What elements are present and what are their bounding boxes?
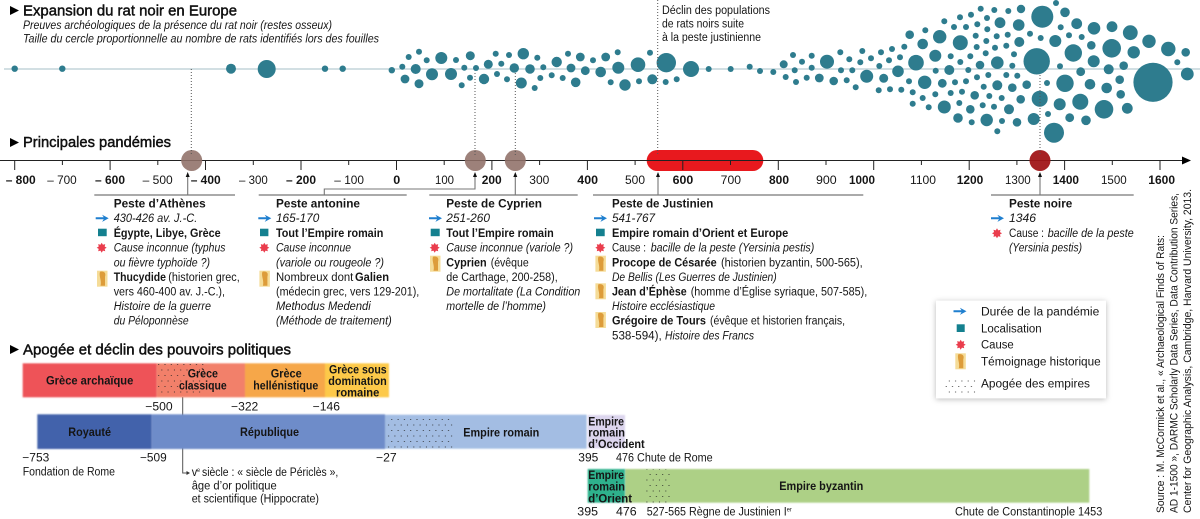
panel: peste d'Athènes: Égypte, Libye, Grèce — [114, 225, 221, 240]
heading: principales pandémies: Principales pandémies — [23, 134, 171, 151]
panel: peste de Justinien: bacille de la peste (Yersinia pestis) — [651, 243, 814, 255]
timeline: Rome: République — [240, 425, 299, 439]
panel: peste d'Athènes: Histoire de la guerre — [114, 301, 211, 313]
timeline: empire romain d'Orient et byzantin: 527-565 Règne de Justinien I — [647, 507, 787, 519]
axis: time scale: 0 — [393, 173, 401, 187]
axis: time scale: 500 — [625, 175, 645, 187]
axis: time scale — [0, 156, 1191, 187]
panel: peste de Cyprien — [429, 195, 580, 313]
timeline: empire romain d'Orient et byzantin: romain — [588, 480, 625, 494]
panel: peste d'Athènes — [94, 195, 240, 328]
timeline: empire romain d'Occident: d’Occident — [588, 437, 645, 451]
timeline: Greece: classique — [179, 378, 227, 392]
markers: pandemic circles — [181, 150, 1050, 171]
panel: peste antonine: Nombreux dont — [276, 272, 354, 284]
axis: time scale: 400 — [577, 173, 598, 187]
panel: peste de Justinien: 538-594), — [612, 330, 662, 342]
heading: expansion du rat noir — [10, 2, 379, 46]
panel: peste de Justinien: Procope de Césarée — [612, 256, 717, 270]
timeline: empire romain d'Occident: Empire — [588, 415, 624, 429]
source note: AD 1-1500 », DARMC Scholarly Data Series, Data Contribution Series, — [1169, 193, 1181, 513]
panel: peste d'Athènes: ou fièvre typhoïde ?) — [114, 258, 210, 270]
red band: peste de Justinien duration — [647, 150, 763, 171]
timeline: empire romain d'Orient et byzantin: Empire — [588, 468, 624, 482]
timeline: empire romain d'Occident — [578, 415, 713, 465]
timeline: Rome: Empire romain — [463, 426, 539, 440]
note: siècle de Périclès: siècle : « siècle de Périclès », — [202, 467, 338, 479]
note: siècle de Périclès: v — [192, 467, 197, 479]
axis: time scale: – 400 — [191, 173, 221, 187]
timeline: Rome: −753 — [22, 453, 49, 465]
source note: Source : M. McCormick et al., « Archaeological Finds of Rats: — [1155, 235, 1167, 513]
panel: peste de Cyprien: Peste de Cyprien — [446, 196, 542, 210]
axis: time scale: 900 — [816, 175, 837, 187]
panel: peste de Justinien: (homme d’Église syriaque, 507-585), — [691, 286, 867, 298]
legend: Localisation — [981, 323, 1042, 335]
panel: peste de Justinien: Empire romain d’Orient et Europe — [612, 226, 789, 240]
panel: peste de Justinien: Peste de Justinien — [612, 196, 713, 210]
timeline: empire romain d'Orient et byzantin: 476 — [616, 507, 637, 519]
timeline: Rome — [22, 414, 587, 478]
timeline: Greece — [23, 362, 389, 414]
timeline: Rome: Fondation de Rome — [23, 466, 115, 478]
timeline: empire romain d'Occident: 476 Chute de Rome — [616, 453, 713, 465]
panel: peste antonine — [258, 195, 419, 328]
panel: peste de Cyprien: de Carthage, 200-258), — [446, 272, 558, 284]
panel: peste noire: Peste noire — [1009, 196, 1073, 210]
panel: peste de Justinien: De Bellis (Les Guerres de Justinien) — [612, 272, 777, 284]
axis: time scale: – 100 — [334, 175, 364, 187]
panel: peste de Cyprien: (évêque — [491, 258, 529, 270]
panel: peste noire: bacille de la peste — [1048, 228, 1134, 240]
source note — [1155, 189, 1194, 513]
legend — [936, 301, 1106, 398]
axis: time scale: 1100 — [910, 175, 936, 187]
note: siècle de Périclès: e — [197, 468, 201, 474]
timeline: Greece: Grèce archaïque — [46, 373, 134, 387]
timeline: Greece: hellénistique — [253, 378, 319, 392]
panel: peste antonine: (variole ou rougeole ?) — [276, 258, 384, 270]
timeline: empire romain d'Orient et byzantin: er — [787, 508, 792, 514]
axis: time scale: 1000 — [849, 173, 875, 187]
panel: peste de Cyprien: Tout l’Empire romain — [446, 226, 554, 240]
axis: time scale: – 500 — [143, 175, 173, 187]
axis: time scale: 1600 — [1148, 173, 1175, 187]
timeline: empire romain d'Occident: romain — [588, 426, 625, 440]
panel: peste de Justinien: Jean d’Éphèse — [612, 284, 687, 298]
timeline: empire romain d'Orient et byzantin: 395 — [577, 507, 598, 519]
axis: time scale: 700 — [721, 175, 741, 187]
axis: time scale: 200 — [482, 173, 502, 187]
panel: peste de Justinien: Histoire des Francs — [665, 330, 754, 342]
panel: peste d'Athènes: du Péloponnèse — [114, 316, 189, 328]
source note: Center for Geographic Analysis, Cambridge, Harvard University, 2013. — [1182, 189, 1194, 513]
axis: time scale: 800 — [769, 173, 789, 187]
Pericles connector line — [183, 397, 190, 475]
panel: peste de Justinien: Cause : — [612, 243, 646, 255]
panel: peste antonine: Methodus Medendi — [276, 301, 371, 313]
panel: peste antonine: Galien — [355, 270, 389, 284]
timeline: Rome: Royauté — [68, 425, 111, 439]
timeline: empire romain d'Orient et byzantin: d’Orient — [588, 491, 632, 505]
timeline: Rome: −509 — [140, 453, 167, 465]
panel: peste antonine: Peste antonine — [276, 196, 360, 210]
timeline: Greece: Grèce sous — [329, 362, 387, 376]
timeline: Greece: domination — [328, 374, 387, 388]
panel: peste antonine: Tout l’Empire romain — [276, 226, 383, 240]
note: siècle de Périclès: âge d’or politique — [192, 480, 277, 492]
panel: peste d'Athènes: Cause inconnue (typhus — [114, 243, 226, 255]
axis: time scale: 1300 — [1005, 175, 1031, 187]
heading: expansion du rat noir: Expansion du rat noir en Europe — [23, 2, 237, 20]
timeline: Greece: −146 — [313, 402, 340, 414]
panel: peste noire: (Yersinia pestis) — [1009, 243, 1082, 255]
axis: time scale: 600 — [673, 173, 694, 187]
note: siècle de Périclès: et scientifique (Hippocrate) — [192, 494, 319, 506]
axis: time scale: 300 — [529, 175, 549, 187]
axis: time scale: 1400 — [1053, 173, 1079, 187]
panel: peste de Cyprien: De mortalitate (La Condition — [446, 286, 580, 298]
timeline: Greece: −322 — [231, 402, 258, 414]
timeline: Greece: −500 — [145, 402, 173, 414]
heading: expansion du rat noir: Preuves archéologiques de la présence du rat noir (restes osseux) — [23, 20, 332, 32]
panel: peste de Cyprien: Cyprien — [446, 256, 487, 270]
panel: peste de Justinien: (évêque et historien français, — [710, 316, 845, 328]
legend: Apogée des empires — [981, 379, 1090, 391]
timeline: empire romain d'Occident: 395 — [578, 453, 598, 465]
panel: peste noire — [991, 195, 1134, 255]
axis: time scale: – 700 — [47, 175, 77, 187]
panel: peste antonine: 165-170 — [276, 213, 320, 225]
annotation: déclin des populations: de rats noirs suite — [662, 18, 744, 30]
panel: peste de Justinien: 541-767 — [612, 213, 656, 225]
axis: time scale: – 600 — [95, 173, 125, 187]
axis: time scale: – 300 — [239, 175, 268, 187]
axis: time scale: 1500 — [1101, 175, 1127, 187]
heading: expansion du rat noir: Taille du cercle proportionnelle au nombre de rats identifiés lors des fouilles — [23, 34, 379, 46]
timeline: Rome: −27 — [376, 453, 397, 465]
timeline: Greece: Grèce — [271, 367, 302, 381]
panel: peste de Justinien — [593, 195, 867, 342]
axis: time scale: – 200 — [286, 173, 316, 187]
panel: peste noire: Cause : — [1009, 228, 1044, 240]
chart: bubble timeline of rat finds — [4, 0, 1200, 143]
panel: peste antonine: (médecin grec, vers 129-201), — [276, 286, 419, 298]
panel: peste de Justinien: Grégoire de Tours — [612, 314, 706, 328]
panel: peste d'Athènes: Peste d’Athènes — [114, 196, 206, 210]
timeline: empire romain d'Orient et byzantin — [577, 468, 1102, 519]
timeline: empire romain d'Orient et byzantin: Empire byzantin — [779, 479, 863, 493]
panel: peste noire: 1346 — [1009, 213, 1037, 225]
timeline: Greece: romaine — [336, 386, 380, 400]
panel: peste de Justinien: (historien byzantin, 500-565), — [721, 258, 863, 270]
connector arrows from pandemic notes to axis — [186, 172, 1042, 195]
panel: peste d'Athènes: vers 460-400 av. J.-C.), — [114, 286, 225, 298]
timeline: Greece: Grèce — [188, 367, 218, 381]
panel: peste d'Athènes: (historien grec, — [168, 272, 240, 284]
panel: peste de Justinien: Histoire ecclésiastique — [612, 301, 715, 313]
panel: peste de Cyprien: Cause inconnue (variole ?) — [446, 243, 573, 255]
annotation: déclin des populations — [662, 5, 770, 44]
panel: peste de Cyprien: 251-260 — [445, 213, 491, 225]
dotted guide lines from bubbles to pandemics — [191, 0, 1040, 156]
panel: peste de Cyprien: mortelle de l’homme) — [446, 301, 546, 313]
legend: Témoignage historique — [981, 357, 1101, 369]
panel: peste d'Athènes: 430-426 av. J.-C. — [114, 213, 197, 225]
timeline: empire romain d'Orient et byzantin: Chute de Constantinople 1453 — [955, 507, 1102, 519]
axis: time scale: 1200 — [957, 173, 984, 187]
annotation: déclin des populations: à la peste justinienne — [662, 32, 761, 44]
axis: time scale: 100 — [435, 175, 454, 187]
panel: peste antonine: Cause inconnue — [276, 243, 351, 255]
legend: Durée de la pandémie — [981, 307, 1099, 319]
panel: peste d'Athènes: Thucydide — [114, 270, 166, 284]
note: siècle de Périclès — [192, 467, 338, 506]
annotation: déclin des populations: Déclin des populations — [662, 5, 770, 17]
legend: Cause — [981, 340, 1014, 352]
axis: time scale: – 800 — [6, 173, 36, 187]
heading: apogée et déclin: Apogée et déclin des pouvoirs politiques — [23, 341, 291, 358]
panel: peste antonine: (Méthode de traitement) — [276, 316, 392, 328]
